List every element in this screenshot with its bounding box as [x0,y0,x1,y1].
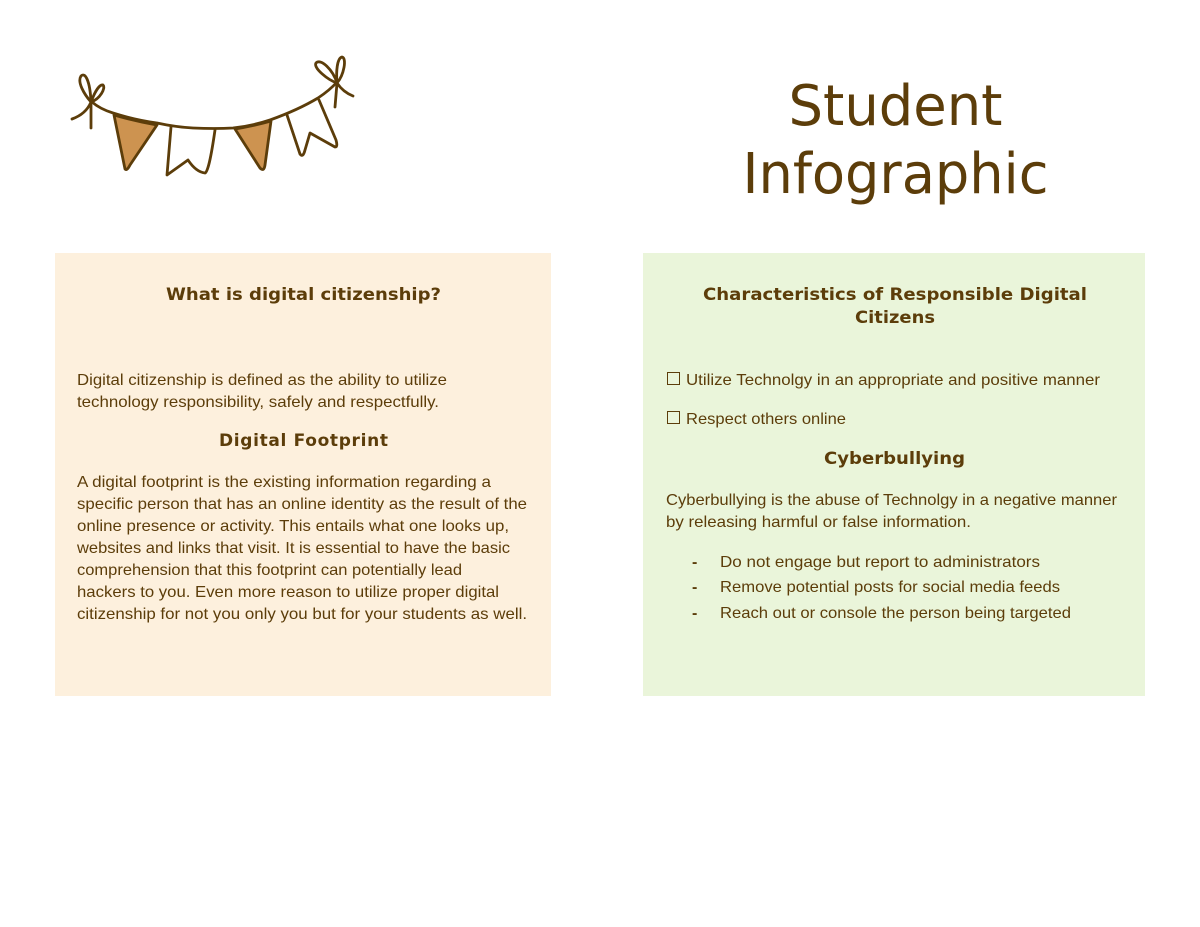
checklist: Utilize Technolgy in an appropriate and positive manner [686,372,1101,389]
text block: footprint description: online presence or activity. This entails what one looks up, [77,518,509,535]
checklist [668,372,1101,428]
text block: footprint description [76,474,527,623]
right bow [316,57,353,107]
heading: digital footprint: Digital Footprint [219,431,388,451]
panel background [55,253,551,696]
heading: characteristics of responsible digital citizens: Characteristics of Responsible Digital [703,285,1087,305]
heading: cyberbullying: Cyberbullying [824,449,965,469]
text block: definition: Digital citizenship is defined as the ability to utilize [77,372,447,389]
list: actions: - [692,579,697,596]
text block: definition [77,372,447,411]
flag: first white pennant [167,127,215,175]
title: Student [788,74,1002,139]
text block: footprint description: A digital footprint is the existing information regarding a [77,474,491,491]
list: actions: Do not engage but report to administrators [720,554,1040,571]
panel background [643,253,1145,696]
text block: footprint description: hackers to you. Even more reason to utilize proper digital [77,584,499,601]
string [92,82,337,128]
heading: characteristics of responsible digital citizens: Citizens [855,308,935,328]
list: actions: - [692,554,697,571]
list: actions: Remove potential posts for social media feeds [720,579,1060,596]
flag: second white pennant [287,100,337,155]
list: actions [692,554,1071,622]
text block: cyberbullying description [666,492,1118,531]
text block: footprint description: websites and links that visit. It is essential to have the basic [76,540,510,557]
panel: characteristics and cyberbullying [643,253,1145,696]
panel: digital citizenship and footprint [55,253,551,696]
left bow [72,75,104,128]
list: actions: - [692,605,697,622]
flag: second orange pennant [235,121,271,169]
text block: footprint description: specific person that has an online identity as the result of the [77,496,527,513]
list: actions: Reach out or console the person being targeted [720,605,1071,622]
flag: first orange pennant [114,115,157,170]
title: Infographic [742,142,1048,207]
text block: footprint description: citizenship for not you only you but for your students as well. [77,606,527,623]
title [742,74,1048,207]
text block: footprint description: comprehension that this footprint can potentially lead [77,562,462,579]
icon: bunting banner [72,57,353,175]
text block: cyberbullying description: Cyberbullying is the abuse of Technolgy in a negative manner [666,492,1118,509]
text block: cyberbullying description: by releasing harmful or false information. [666,514,971,531]
checklist: Respect others online [686,411,846,428]
heading: what is digital citizenship: What is digital citizenship? [166,285,441,305]
text block: definition: technology responsibility, safely and respectfully. [77,394,439,411]
heading: characteristics of responsible digital citizens [703,285,1087,328]
